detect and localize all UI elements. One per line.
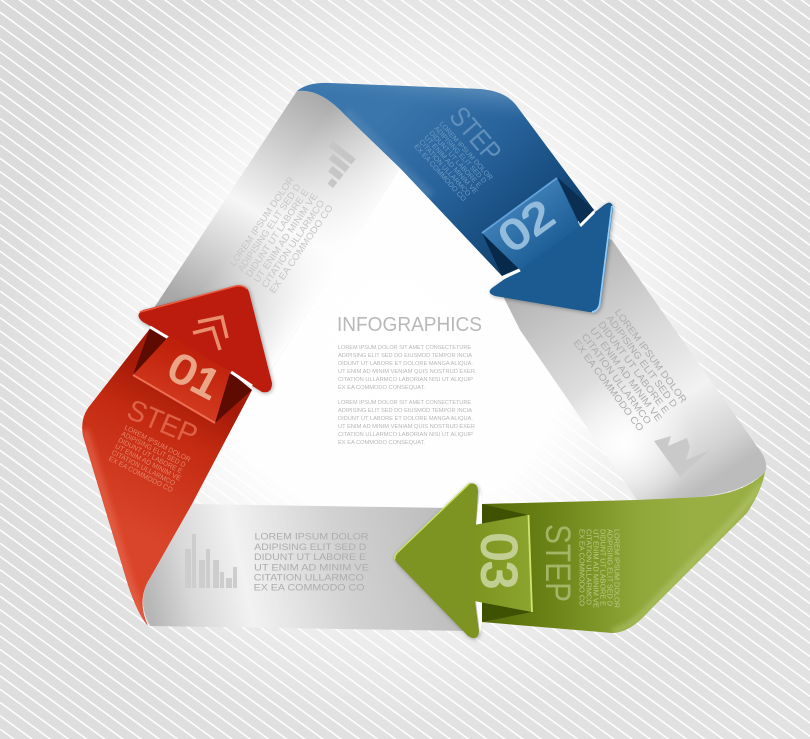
paragraphs: EX EA COMMODO CONSEQUAT. xyxy=(338,440,425,446)
paragraphs: CITATION ULLARMCO LABORIAN NISI UT ALIQUIP xyxy=(338,432,473,438)
arrow head xyxy=(490,203,613,312)
paragraphs: EX EA COMMODO CONSEQUAT. xyxy=(338,385,425,391)
icon: bar chart xyxy=(185,534,237,588)
silver band: top left xyxy=(150,91,400,378)
text: right band: ADIPISING ELIT SED D xyxy=(604,313,679,410)
paragraphs: UT ENIM AD MINIM VENIAM QUIS NOSTRUD EXER xyxy=(338,369,475,375)
step text: CITATION ULLARMCO xyxy=(417,139,472,198)
step text: UT ENIM AD MINIM VE xyxy=(114,443,182,483)
paragraphs: ADIPISING ELIT SED DO EIUSMOD TEMPOR INCIA xyxy=(338,408,472,414)
step label flap xyxy=(482,178,580,270)
text: top left band: CITATION ULLARMCO xyxy=(260,198,326,290)
text: top left band xyxy=(228,175,336,295)
step text: ADIPISING ELIT SED D xyxy=(432,125,487,185)
paragraphs: DIDUNT UT LABORE ET DOLORE MANGA ALIQUA. xyxy=(338,416,473,422)
step label flap xyxy=(133,335,230,423)
step text xyxy=(107,425,192,495)
step 02: blue ribbon and arrow xyxy=(297,83,613,312)
paragraphs: ADIPISING ELIT SED DO EIUSMOD TEMPOR INCIA xyxy=(338,353,472,359)
paragraphs xyxy=(338,345,475,446)
centre text block xyxy=(337,314,482,446)
step text xyxy=(578,529,620,608)
step 01: red ribbon and arrow xyxy=(82,286,272,626)
text: right band: CITATION ULLARMCO xyxy=(579,332,653,427)
fold shadows xyxy=(557,177,594,224)
paragraphs: DIDUNT UT LABORE ET DOLORE MANGA ALIQUA. xyxy=(338,361,473,367)
step text: ADIPISING ELIT SED D xyxy=(606,529,612,606)
text: bottom band xyxy=(254,532,369,594)
step label flap xyxy=(474,515,532,612)
text: bottom band: EX EA COMMODO CO xyxy=(254,583,365,594)
step text: CITATION ULLARMCO xyxy=(584,529,592,606)
step text: LOREM IPSUM DOLOR xyxy=(438,121,494,182)
text: top left band: EX EA COMMODO CO xyxy=(268,203,335,295)
text: right band xyxy=(571,307,689,436)
icon: double chevron xyxy=(193,317,227,350)
paragraphs: UT ENIM AD MINIM VENIAM QUIS NOSTRUD EXER xyxy=(338,424,475,430)
text: top left band: DIDUNT UT LABORE E xyxy=(244,187,311,279)
step text: ADIPISING ELIT SED D xyxy=(120,431,186,469)
step text: UT ENIM AD MINIM VE xyxy=(592,529,598,608)
text: right band: UT ENIM AD MINIM VE xyxy=(587,326,664,424)
text: right band: DIDUNT UT LABORE E xyxy=(595,319,671,416)
paragraphs: CITATION ULLARMCO LABORIAN NISI UT ALIQUIP xyxy=(338,377,473,383)
step text: CITATION ULLARMCO xyxy=(110,449,176,488)
arrow head xyxy=(138,286,272,392)
step text xyxy=(412,121,494,205)
text: bottom band: DIDUNT UT LABORE E xyxy=(254,552,366,563)
number 03: 03 xyxy=(471,533,527,589)
step text: DIDUNT UT LABORE E xyxy=(117,437,183,476)
step text: EX EA COMMODO CO xyxy=(412,143,467,203)
text: right band: LOREM IPSUM DOLOR xyxy=(612,307,689,406)
heading: INFOGRAPHICS xyxy=(337,314,482,336)
paragraphs: LOREM IPSUM DOLOR SIT AMET CONSECTETURE xyxy=(338,345,471,351)
step text: DIDUNT UT LABORE E xyxy=(598,529,606,606)
text: right band: EX EA COMMODO CO xyxy=(571,338,645,434)
arrow head xyxy=(395,483,479,638)
step text: EX EA COMMODO CO xyxy=(107,456,174,494)
text: top left band: LOREM IPSUM DOLOR xyxy=(228,175,296,268)
text: top left band: UT ENIM AD MINIM VE xyxy=(252,191,320,284)
step heading: STEP xyxy=(122,394,202,452)
step text: EX EA COMMODO CO xyxy=(578,529,584,607)
step text: LOREM IPSUM DOLOR xyxy=(123,425,191,464)
fold shadows xyxy=(482,504,528,525)
text: top left band: ADIPISING ELIT SED D xyxy=(236,182,303,274)
step heading: STEP xyxy=(538,524,577,602)
step text: UT ENIM AD MINIM VE xyxy=(422,134,479,196)
text: bottom band: ADIPISING ELIT SED D xyxy=(254,542,366,553)
paragraphs: LOREM IPSUM DOLOR SIT AMET CONSECTETURE xyxy=(338,400,471,406)
number 02: 02 xyxy=(490,190,563,261)
fold shadows xyxy=(133,328,170,375)
text: bottom band: CITATION ULLARMCO xyxy=(254,572,364,584)
silver band: bottom xyxy=(143,504,470,631)
text: bottom band: UT ENIM AD MINIM VE xyxy=(254,562,369,573)
step heading: STEP xyxy=(443,101,508,168)
number 01: 01 xyxy=(161,343,228,408)
text: bottom band: LOREM IPSUM DOLOR xyxy=(254,532,369,542)
icon: signal bars xyxy=(310,141,356,188)
step text: LOREM IPSUM DOLOR xyxy=(612,529,620,608)
step text: DIDUNT UT LABORE E xyxy=(427,130,482,190)
step 03: green ribbon and arrow xyxy=(395,472,765,638)
silver band: right xyxy=(503,235,766,500)
icon: crown chart xyxy=(654,436,710,477)
